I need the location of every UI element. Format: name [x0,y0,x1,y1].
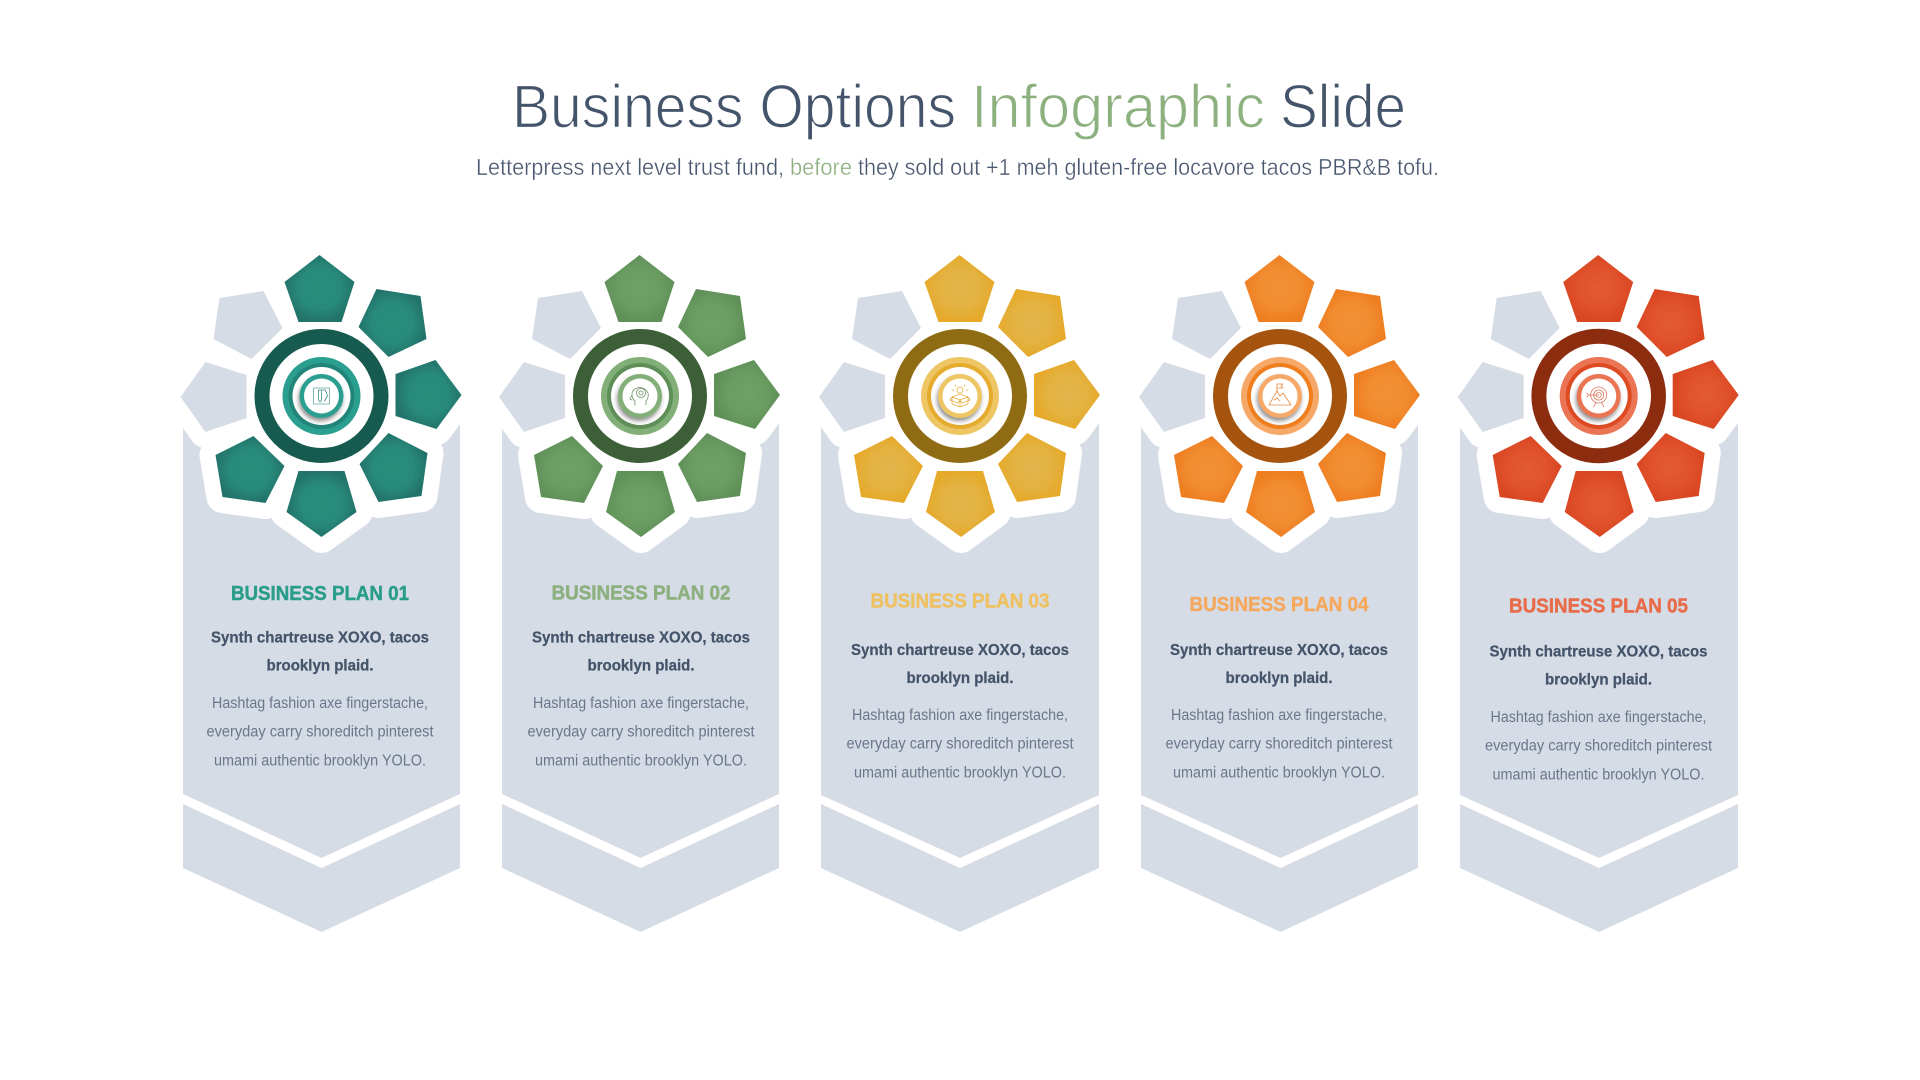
subheading [211,630,429,674]
subheading [1170,642,1388,687]
title: Infographic [971,72,1265,142]
subheading: Synth chartreuse XOXO, tacos [211,630,429,646]
title [512,72,1406,142]
subheading [851,642,1069,687]
subtitle [476,154,1439,180]
heading: BUSINESS PLAN 01 [231,583,409,605]
description: Hashtag fashion axe fingerstache, [533,695,749,712]
panel: business plan 02 [499,255,780,932]
heading: BUSINESS PLAN 03 [870,590,1050,612]
subheading [532,630,750,674]
description: everyday carry shoreditch pinterest [846,736,1074,752]
flower emblem [1139,255,1420,537]
title: Business Options [512,72,956,142]
heading: BUSINESS PLAN 05 [1509,596,1688,618]
panel: business plan 01 [180,255,462,932]
description: Hashtag fashion axe fingerstache, [852,707,1068,724]
description [206,695,434,770]
icon: mountain with flag [1269,384,1291,405]
description: Hashtag fashion axe fingerstache, [212,695,428,712]
subheading: brooklyn plaid. [1226,670,1332,687]
icon: head with brain [630,388,648,405]
icon: pencil document [314,388,330,404]
subtitle: Letterpress next level trust fund, [476,154,784,180]
icon: box with light bulb [950,385,970,407]
description: everyday carry shoreditch pinterest [1166,736,1393,752]
description: everyday carry shoreditch pinterest [1485,738,1713,754]
card background [502,396,779,932]
description: umami authentic brooklyn YOLO. [535,752,747,770]
flower emblem [819,255,1100,537]
card background [821,396,1099,932]
subheading: Synth chartreuse XOXO, tacos [1170,642,1388,659]
subheading: Synth chartreuse XOXO, tacos [1490,644,1708,660]
subheading: brooklyn plaid. [266,658,374,674]
panel: business plan 04 [1139,255,1420,932]
description: umami authentic brooklyn YOLO. [1492,766,1704,784]
icon: target with arrow [1587,387,1607,407]
subtitle: they sold out +1 meh gluten-free locavore tacos PBR&B tofu. [858,154,1439,180]
subheading: Synth chartreuse XOXO, tacos [532,630,750,646]
flower emblem [499,255,780,537]
description: umami authentic brooklyn YOLO. [1173,764,1385,782]
panel: business plan 03 [819,255,1100,932]
description: Hashtag fashion axe fingerstache, [1490,709,1706,726]
description [1166,707,1393,782]
card background [1141,396,1418,932]
subheading: brooklyn plaid. [588,658,694,674]
panel: business plan 05 [1458,255,1739,932]
subheading [1490,644,1708,688]
subtitle: before [790,154,852,180]
description: umami authentic brooklyn YOLO. [214,752,426,770]
title: Slide [1280,72,1406,142]
description [528,695,755,770]
subheading: brooklyn plaid. [906,670,1014,687]
card background [1460,396,1738,932]
heading: BUSINESS PLAN 02 [552,582,730,604]
heading: BUSINESS PLAN 04 [1190,594,1369,616]
description: everyday carry shoreditch pinterest [206,724,434,740]
subheading: brooklyn plaid. [1545,672,1652,688]
description: Hashtag fashion axe fingerstache, [1171,707,1387,724]
description [1485,709,1713,784]
flower emblem [1458,255,1739,537]
description: everyday carry shoreditch pinterest [528,724,755,740]
subheading: Synth chartreuse XOXO, tacos [851,642,1069,659]
card background [183,396,460,932]
description: umami authentic brooklyn YOLO. [854,764,1066,782]
description [846,707,1074,782]
flower emblem [180,255,462,537]
